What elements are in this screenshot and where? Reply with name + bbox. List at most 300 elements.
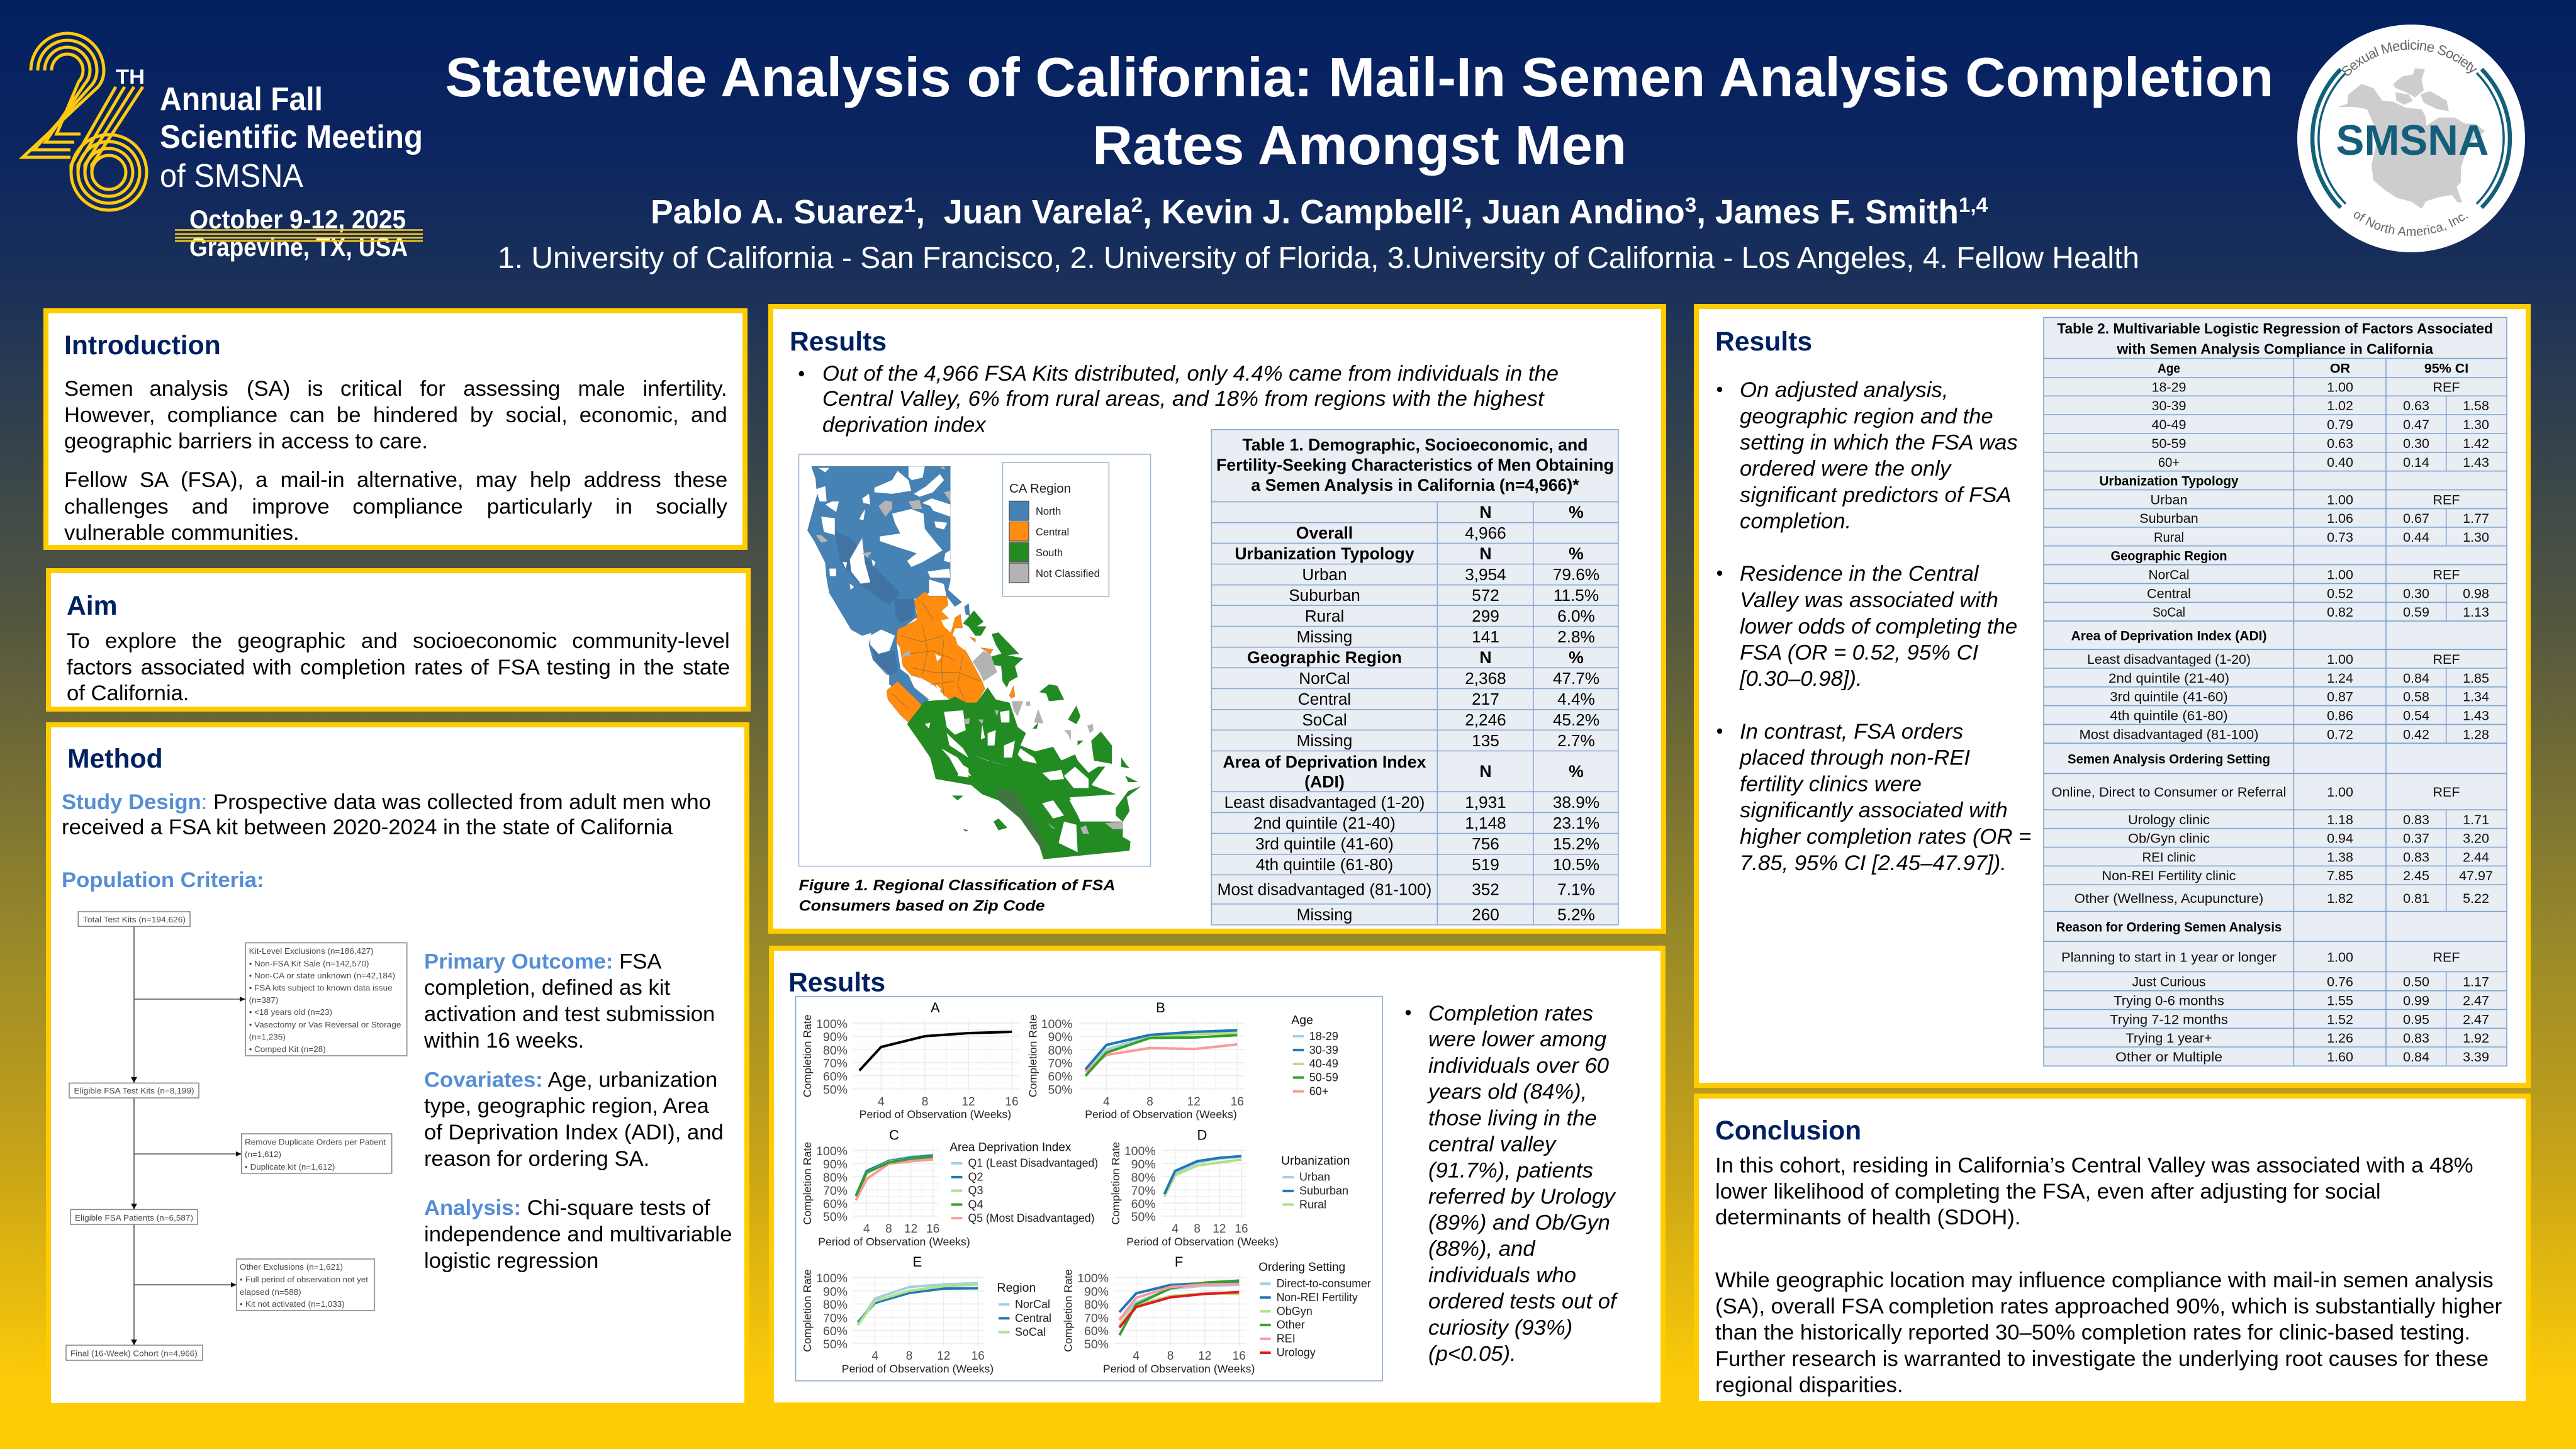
- table 2: logistic regression: Planning to start in 1 year or longer: [2061, 949, 2276, 965]
- chart C: area deprivation index: C: [889, 1127, 899, 1143]
- text: non-REI clinics bullet: 7.85, 95% CI [2.45–47.97]).: [1740, 851, 2007, 875]
- flowchart: cohort selection: •: [249, 971, 252, 980]
- text: adjusted analysis bullet: On adjusted analysis,: [1740, 378, 1948, 402]
- table 1: demographics: 79.6%: [1553, 565, 1599, 584]
- table 2: logistic regression: 2.45: [2403, 868, 2429, 883]
- text: introduction paragraph 2: SA: [140, 468, 169, 492]
- chart E: region: 60%: [823, 1324, 848, 1338]
- table 2: logistic regression: 2.47: [2463, 993, 2489, 1009]
- table 1: demographics: 10.5%: [1553, 855, 1599, 874]
- table 2: logistic regression: 40-49: [2152, 417, 2186, 432]
- heading: introduction: Introduction: [64, 330, 221, 361]
- table 1: demographics: Area of Deprivation Index: [1223, 752, 1426, 771]
- chart A: overall: Completion Rate: [801, 1014, 814, 1097]
- text: aim statement: the: [644, 656, 674, 680]
- text: covariates: reason for ordering SA.: [424, 1147, 649, 1171]
- chart E: region: 50%: [823, 1338, 848, 1351]
- text: study design: [62, 790, 711, 839]
- authors: , Juan Varela: [916, 194, 1131, 231]
- table 2: logistic regression: 1.43: [2463, 708, 2489, 724]
- text: covariates: of Deprivation Index (ADI), and: [424, 1121, 724, 1144]
- table 2: logistic regression: 0.83: [2403, 1031, 2429, 1046]
- table 1: demographics: 6.0%: [1557, 607, 1595, 625]
- text: study design: received a FSA kit between 2020-2024 in the state of California: [62, 815, 673, 839]
- table 1: demographics: SoCal: [1302, 710, 1347, 729]
- text: covariates: Covariates: Age, urbanization: [424, 1068, 717, 1092]
- chart E: region: 100%: [816, 1272, 848, 1285]
- chart E: region: Central: [1015, 1312, 1051, 1324]
- table 2: logistic regression: OR: [2330, 361, 2351, 376]
- panel: introduction: geographic barriers in access to care.: [64, 429, 428, 453]
- chart B: age: 50%: [1048, 1083, 1072, 1097]
- chart C: area deprivation index: 70%: [823, 1184, 848, 1198]
- chart C: area deprivation index: 12: [904, 1222, 917, 1236]
- text: covariates: [424, 1068, 724, 1171]
- heading: population criteria: Population Criteria:: [62, 868, 264, 892]
- panel: results, completion curves: [771, 948, 1663, 1405]
- chart F: ordering setting: 12: [1198, 1350, 1211, 1363]
- authors: Pablo A. Suarez: [651, 194, 903, 231]
- chart F: ordering setting: 4: [1133, 1350, 1140, 1363]
- table 2: logistic regression: Just Curious: [2132, 975, 2206, 990]
- chart C: area deprivation index: 100%: [816, 1144, 848, 1158]
- table 1: demographics: N: [1479, 503, 1492, 522]
- table 2: logistic regression: REF: [2433, 380, 2460, 395]
- table 2: logistic regression: 1.34: [2463, 690, 2489, 705]
- table 2: logistic regression: 1.77: [2463, 511, 2489, 526]
- table 2: logistic regression: 0.83: [2403, 812, 2429, 827]
- text: completion rate bullet: (p<0.05).: [1428, 1342, 1516, 1366]
- table 2: logistic regression: Age: [2158, 361, 2180, 376]
- chart C: area deprivation index: 50%: [823, 1211, 848, 1224]
- chart F: ordering setting: REI: [1277, 1333, 1296, 1345]
- chart D: urbanization: 4: [1172, 1222, 1179, 1236]
- chart B: age: 8: [1146, 1095, 1153, 1109]
- panel: introduction: be: [337, 403, 361, 427]
- figure caption: Consumers based on Zip Code: [799, 897, 1044, 915]
- table 1: demographics: 1,148: [1465, 814, 1506, 832]
- table 2: logistic regression: Trying 1 year+: [2125, 1031, 2212, 1046]
- table 2: logistic regression: 0.67: [2403, 511, 2429, 526]
- text: completion rate bullet: were lower among: [1428, 1027, 1606, 1051]
- chart A: overall: 90%: [823, 1031, 848, 1044]
- chart B: age: 60%: [1048, 1070, 1072, 1083]
- table 1: demographics: Urban: [1302, 565, 1347, 584]
- table 2: logistic regression: 5.22: [2463, 891, 2489, 906]
- authors: 2: [1452, 193, 1464, 216]
- table 2: logistic regression: 0.99: [2403, 993, 2429, 1009]
- table 2: logistic regression: 0.82: [2327, 605, 2353, 620]
- table 2: logistic regression: 1.60: [2327, 1049, 2353, 1065]
- chart F: ordering setting: Direct-to-consumer: [1277, 1277, 1371, 1290]
- table 2: logistic regression: 3.39: [2463, 1049, 2489, 1065]
- central zip-code boundaries: [892, 602, 981, 709]
- flowchart: cohort selection: FSA kits subject to known data issue: [254, 983, 393, 993]
- table 2: logistic regression: 1.00: [2327, 380, 2353, 395]
- chart D: urbanization: Urban: [1299, 1171, 1330, 1183]
- chart B: age: 100%: [1041, 1017, 1072, 1031]
- text: aim statement: the: [192, 629, 222, 653]
- table 2: logistic regression: Online, Direct to Consumer or Referral: [2051, 785, 2287, 800]
- chart D: urbanization: 90%: [1131, 1158, 1156, 1172]
- text: results bullet: Central Valley, 6% from rural areas, and 18% from regions with the highest: [822, 387, 1545, 411]
- table 2: logistic regression: Non-REI Fertility clinic: [2102, 868, 2236, 883]
- table 1: demographics: Rural: [1305, 607, 1344, 625]
- flowchart: cohort selection: Non-FSA Kit Sale (n=142,570): [254, 959, 369, 968]
- flowchart: cohort selection: Full period of observation not yet: [245, 1275, 368, 1284]
- table 2: logistic regression: 1.17: [2463, 975, 2489, 990]
- chart E: region: Completion Rate: [801, 1269, 814, 1352]
- text: conclusion paragraph 2: regional disparities.: [1715, 1373, 1903, 1397]
- table 2: logistic regression: 4th quintile (61-80): [2110, 708, 2228, 724]
- figure 1: map of California regions: [799, 454, 1150, 866]
- chart F: ordering setting: Non-REI Fertility: [1277, 1291, 1358, 1304]
- chart A: overall: 100%: [816, 1017, 848, 1031]
- table 2: logistic regression: 95% CI: [2424, 361, 2468, 376]
- table 2: logistic regression: Other or Multiple: [2115, 1049, 2222, 1065]
- text: completion rate bullet: [1406, 1002, 1618, 1366]
- text: introduction paragraph 2: (FSA),: [181, 468, 244, 492]
- chart F: ordering setting: 16: [1233, 1350, 1246, 1363]
- table 2: logistic regression: 1.30: [2463, 417, 2489, 432]
- table 2: logistic regression: Central: [2147, 586, 2191, 601]
- flowchart: cohort selection: [66, 912, 407, 1360]
- panel: introduction: and: [691, 403, 727, 427]
- chart B: age: 90%: [1048, 1031, 1072, 1044]
- chart B: age: Age: [1291, 1013, 1313, 1027]
- text: central valley bullet: FSA (OR = 0.52, 95% CI: [1740, 641, 1978, 665]
- table 2: logistic regression: 1.24: [2327, 671, 2353, 686]
- logo stripes: [175, 230, 423, 241]
- chart E: region: [801, 1254, 1051, 1375]
- table 1: demographics: N: [1479, 762, 1492, 781]
- table 2: logistic regression: 0.47: [2403, 417, 2429, 432]
- text: completion rate bullet: individuals over 60: [1428, 1054, 1609, 1078]
- text: completion rate bullet: years old (84%),: [1427, 1080, 1587, 1104]
- flowchart: cohort selection: (n=1,235): [249, 1032, 286, 1042]
- table 2: logistic regression: 0.58: [2403, 690, 2429, 705]
- table 1: demographics: 217: [1472, 690, 1499, 708]
- chart B: age: 30-39: [1309, 1044, 1338, 1056]
- text: covariates: type, geographic region, Area: [424, 1094, 709, 1118]
- table 2: logistic regression: REF: [2433, 492, 2460, 507]
- chart E: region: 80%: [823, 1298, 848, 1312]
- table 1: demographics: %: [1569, 762, 1584, 781]
- panel: introduction: by: [470, 403, 493, 427]
- text: aim statement: To: [67, 629, 90, 653]
- table 1: demographics: 3rd quintile (41-60): [1255, 834, 1394, 853]
- table 1: demographics: 38.9%: [1553, 793, 1599, 812]
- logo text: TH: [116, 65, 145, 88]
- text: conclusion paragraph 1: [1715, 1154, 2473, 1229]
- table 1: demographics: 260: [1472, 905, 1499, 924]
- chart F: ordering setting: 90%: [1084, 1285, 1109, 1299]
- chart A: overall: A: [931, 1000, 940, 1015]
- table 1: demographics: 2.7%: [1557, 731, 1595, 750]
- table 1: demographics: 45.2%: [1553, 710, 1599, 729]
- flowchart: cohort selection: Eligible FSA Patients (n=6,587): [75, 1213, 193, 1222]
- text: completion rate bullet: curiosity (93%): [1428, 1316, 1572, 1340]
- panel: introduction: social,: [506, 403, 568, 427]
- text: conclusion paragraph 2: (SA), overall FSA completion rates approached 90%, which is substantially higher: [1715, 1295, 2502, 1319]
- table 2: logistic regression: Most disadvantaged (81-100): [2079, 727, 2259, 742]
- table 2: logistic regression: REF: [2433, 568, 2460, 583]
- table 1: demographics: 2,246: [1465, 710, 1506, 729]
- text: analysis: Analysis: Chi-square tests of: [424, 1196, 710, 1220]
- text: aim statement: of: [471, 656, 489, 680]
- panel: introduction: hindered: [373, 403, 458, 427]
- table 1: demographics: 519: [1472, 855, 1499, 874]
- table 1: demographics: Table 1. Demographic, Socioeconomic, and: [1242, 435, 1588, 454]
- panel: introduction: particularly: [487, 495, 593, 519]
- chart B: age: 4: [1103, 1095, 1110, 1109]
- table 2: logistic regression: Geographic Region: [2110, 549, 2227, 564]
- panel: method: [48, 725, 747, 1406]
- flowchart: cohort selection: Vasectomy or Vas Reversal or Storage: [254, 1020, 401, 1029]
- flowchart: cohort selection: Kit-Level Exclusions (n=186,427): [249, 946, 374, 956]
- text: conclusion paragraph 2: than the historically reported 30–50% completion rates for clinic-based testing.: [1715, 1321, 2470, 1345]
- table 1: demographics: 3,954: [1465, 565, 1506, 584]
- table 1: demographics: 4.4%: [1557, 690, 1595, 708]
- table 1: demographics: 4,966: [1465, 523, 1506, 542]
- table 2: logistic regression: Trying 0-6 months: [2114, 993, 2224, 1009]
- table 1: demographics: 15.2%: [1553, 834, 1599, 853]
- text: introduction paragraph 2: these: [675, 468, 727, 492]
- text: completion rate bullet: individuals who: [1428, 1263, 1576, 1287]
- text: completion rate bullet: ordered tests out of: [1428, 1290, 1618, 1314]
- text: introduction paragraph 1: male: [578, 377, 625, 401]
- chart D: urbanization: Rural: [1299, 1198, 1326, 1211]
- table 2: logistic regression: 2.47: [2463, 1012, 2489, 1027]
- table 2: logistic regression: [2044, 317, 2507, 1066]
- text: aim statement: state: [683, 656, 730, 680]
- table 1: demographics: 5.2%: [1557, 905, 1595, 924]
- table 2: logistic regression: Other (Wellness, Acupuncture): [2075, 891, 2263, 906]
- table 2: logistic regression: 0.54: [2403, 708, 2429, 724]
- text: completion rate bullet: central valley: [1428, 1133, 1557, 1156]
- flowchart: cohort selection: Final (16-Week) Cohort (n=4,966): [70, 1349, 198, 1358]
- panel: introduction: improve: [252, 495, 330, 519]
- text: conclusion paragraph 1: In this cohort, residing in California’s Central Valley was associated with a 48%: [1715, 1154, 2473, 1178]
- panel: introduction: However,: [64, 403, 155, 427]
- text: introduction paragraph 1: assessing: [463, 377, 560, 401]
- chart A: overall: 60%: [823, 1070, 848, 1083]
- flowchart: cohort selection: •: [240, 1275, 243, 1284]
- table 1: demographics: 11.5%: [1554, 586, 1599, 605]
- table 2: logistic regression: 1.00: [2327, 492, 2353, 507]
- text: introduction paragraph 1: infertility.: [643, 377, 727, 401]
- flowchart: cohort selection: Total Test Kits (n=194,626): [83, 915, 186, 924]
- chart E: region: SoCal: [1015, 1326, 1046, 1338]
- text: adjusted analysis bullet: geographic region and the: [1740, 405, 1993, 428]
- chart E: region: Region: [997, 1281, 1036, 1295]
- legend: CA region: Central: [1036, 527, 1069, 538]
- text: aim statement: explore: [105, 629, 177, 653]
- table 2: logistic regression: 0.50: [2403, 975, 2429, 990]
- table 2: logistic regression: 1.00: [2327, 568, 2353, 583]
- text: analysis: independence and multivariable: [424, 1222, 732, 1246]
- chart C: area deprivation index: [801, 1127, 1098, 1248]
- flowchart: cohort selection: (n=1,612): [245, 1150, 281, 1159]
- heading: method: Method: [67, 744, 163, 774]
- table 2: logistic regression: Least disadvantaged (1-20): [2087, 652, 2251, 667]
- table 1: demographics: 2,368: [1465, 669, 1506, 688]
- heading: conclusion: Conclusion: [1715, 1116, 1861, 1146]
- table 1: demographics: Most disadvantaged (81-100): [1218, 880, 1431, 899]
- flowchart: cohort selection: elapsed (n=588): [240, 1287, 301, 1297]
- title: Rates Amongst Men: [1092, 114, 1627, 176]
- chart D: urbanization: 100%: [1124, 1144, 1156, 1158]
- table 2: logistic regression: 0.95: [2403, 1012, 2429, 1027]
- table 2: logistic regression: Area of Deprivation Index (ADI): [2071, 629, 2266, 644]
- table 1: demographics: Overall: [1296, 523, 1353, 542]
- heading: aim: Aim: [67, 591, 118, 621]
- chart E: region: 70%: [823, 1311, 848, 1325]
- text: results bullet: Out of the 4,966 FSA Kits distributed, only 4.4% came from individuals in the: [822, 362, 1559, 386]
- chart F: ordering setting: 8: [1167, 1350, 1173, 1363]
- table 2: logistic regression: 0.72: [2327, 727, 2353, 742]
- table 2: logistic regression: Suburban: [2139, 511, 2198, 526]
- table 2: logistic regression: 0.40: [2327, 455, 2353, 470]
- table 2: logistic regression: 0.42: [2403, 727, 2429, 742]
- flowchart: cohort selection: Remove Duplicate Orders per Patient: [245, 1137, 386, 1146]
- chart C: area deprivation index: Completion Rate: [801, 1142, 814, 1225]
- table 2: logistic regression: 1.28: [2463, 727, 2489, 742]
- panel: aim: [48, 571, 748, 709]
- table 1: demographics: Missing: [1297, 905, 1352, 924]
- table 2: logistic regression: 18-29: [2152, 380, 2186, 395]
- chart C: area deprivation index: 4: [863, 1222, 870, 1236]
- panel: introduction: economic,: [580, 403, 679, 427]
- text: analysis: logistic regression: [424, 1249, 598, 1273]
- legend: CA region: South: [1036, 547, 1063, 559]
- chart B: age: 60+: [1309, 1085, 1328, 1098]
- text: primary outcome: completion, defined as kit: [424, 976, 670, 1000]
- text: introduction paragraph 2: help: [530, 468, 571, 492]
- text: introduction paragraph 2: Fellow: [64, 468, 128, 492]
- table 1: demographics: N: [1479, 648, 1492, 667]
- table 2: logistic regression: 0.59: [2403, 605, 2429, 620]
- text: introduction paragraph 1: is: [307, 377, 323, 401]
- table 1: demographics: 2nd quintile (21-40): [1253, 814, 1396, 832]
- table 1: demographics: (ADI): [1304, 773, 1345, 792]
- table 2: logistic regression: 1.71: [2463, 812, 2489, 827]
- flowchart: cohort selection: Duplicate kit (n=1,612): [250, 1162, 335, 1172]
- text: conclusion paragraph 1: determinants of health (SDOH).: [1715, 1206, 2020, 1229]
- logo text: of SMSNA: [160, 158, 303, 194]
- title: [445, 46, 2274, 176]
- table 1: demographics: 7.1%: [1557, 880, 1595, 899]
- table 2: logistic regression: REI clinic: [2142, 849, 2196, 864]
- chart C: area deprivation index: Q1 (Least Disadvantaged): [968, 1157, 1098, 1170]
- text: aim statement: of California.: [67, 681, 189, 705]
- text: adjusted analysis bullet: completion.: [1740, 510, 1851, 534]
- authors: 1: [904, 193, 916, 216]
- chart E: region: 4: [871, 1350, 878, 1363]
- text: central valley bullet: [0.30–0.98]).: [1739, 667, 1862, 691]
- text: aim statement: socioeconomic: [413, 629, 557, 653]
- table 2: logistic regression: 0.52: [2327, 586, 2353, 601]
- table 2: logistic regression: 30-39: [2152, 398, 2186, 413]
- table 2: logistic regression: Table 2. Multivariable Logistic Regression of Factors Associated: [2057, 320, 2493, 337]
- flowchart: cohort selection: Eligible FSA Test Kits (n=8,199): [74, 1086, 194, 1095]
- chart D: urbanization: 50%: [1131, 1211, 1156, 1224]
- table 1: demographics: Fertility-Seeking Characteristics of Men Obtaining: [1216, 456, 1614, 474]
- table 2: logistic regression: 1.30: [2463, 530, 2489, 545]
- text: introduction paragraph 1: for: [420, 377, 445, 401]
- chart B: age: 18-29: [1309, 1030, 1338, 1043]
- table 2: logistic regression: Ob/Gyn clinic: [2128, 831, 2210, 846]
- table 2: logistic regression: 0.76: [2327, 975, 2353, 990]
- table 2: logistic regression: 1.18: [2327, 812, 2353, 827]
- panel: conclusion: [1696, 1096, 2528, 1404]
- text: conclusion paragraph 1: lower likelihood of completing the FSA, even after adjusting for social: [1715, 1180, 2381, 1204]
- table 2: logistic regression: 0.14: [2403, 455, 2429, 470]
- table 2: logistic regression: Reason for Ordering Semen Analysis: [2056, 920, 2282, 935]
- logo: SMSNA seal: SMSNA: [2336, 116, 2489, 164]
- legend: CA region: CA Region: [1009, 481, 1071, 496]
- chart B: age: B: [1156, 1000, 1165, 1015]
- table 1: demographics: NorCal: [1299, 669, 1350, 688]
- table 1: demographics: 756: [1472, 834, 1499, 853]
- chart B: age: 16: [1231, 1095, 1244, 1109]
- panel: results, map and demographics: [771, 306, 1664, 931]
- panel: introduction: compliance: [167, 403, 277, 427]
- chart D: urbanization: 8: [1194, 1222, 1201, 1236]
- table 2: logistic regression: 0.63: [2327, 436, 2353, 451]
- table 2: logistic regression: NorCal: [2148, 568, 2190, 583]
- table 1: demographics: 135: [1472, 731, 1499, 750]
- map: region polygons: [807, 466, 1140, 859]
- authors: , James F. Smith: [1696, 194, 1959, 231]
- heading: results: Results: [1715, 327, 1812, 357]
- text: introduction paragraph 2: address: [584, 468, 661, 492]
- chart D: urbanization: D: [1197, 1127, 1207, 1143]
- flowchart: cohort selection: •: [249, 1044, 252, 1054]
- chart E: region: 8: [906, 1350, 912, 1363]
- flowchart: cohort selection: •: [249, 1020, 252, 1029]
- text: results bullet: deprivation index: [822, 413, 987, 437]
- flowchart: cohort selection: Kit not activated (n=1,033): [245, 1299, 345, 1309]
- legend: CA region: Not Classified: [1036, 568, 1100, 579]
- chart A: overall: 80%: [823, 1044, 848, 1058]
- table 2: logistic regression: 1.06: [2327, 511, 2353, 526]
- text: completion rate bullet: Completion rates: [1428, 1002, 1593, 1026]
- chart C: area deprivation index: Q3: [968, 1184, 983, 1197]
- chart B: age: 80%: [1048, 1044, 1072, 1058]
- table 2: logistic regression: 1.38: [2327, 849, 2353, 864]
- table 2: logistic regression: 1.13: [2463, 605, 2489, 620]
- table 2: logistic regression: REF: [2433, 652, 2460, 667]
- table 2: logistic regression: 2.44: [2463, 849, 2489, 864]
- table 2: logistic regression: 0.81: [2403, 891, 2429, 906]
- table 2: logistic regression: Urban: [2151, 492, 2187, 507]
- text: aim statement: [67, 629, 730, 705]
- panel: introduction: [46, 311, 745, 547]
- flowchart: cohort selection: •: [249, 983, 252, 993]
- chart D: urbanization: [1109, 1127, 1350, 1248]
- text: primary outcome: within 16 weeks.: [423, 1029, 584, 1053]
- table 2: logistic regression: 1.55: [2327, 993, 2353, 1009]
- text: non-REI clinics bullet: In contrast, FSA orders: [1740, 720, 1963, 744]
- panel: introduction: and: [192, 495, 228, 519]
- table 2: logistic regression: Rural: [2154, 530, 2184, 545]
- flowchart: cohort selection: Non-CA or state unknown (n=42,184): [254, 971, 395, 980]
- table 2: logistic regression: 1.02: [2327, 398, 2353, 413]
- chart D: urbanization: 70%: [1131, 1184, 1156, 1198]
- table 2: logistic regression: 0.63: [2403, 398, 2429, 413]
- text: non-REI clinics bullet: [1717, 720, 2031, 875]
